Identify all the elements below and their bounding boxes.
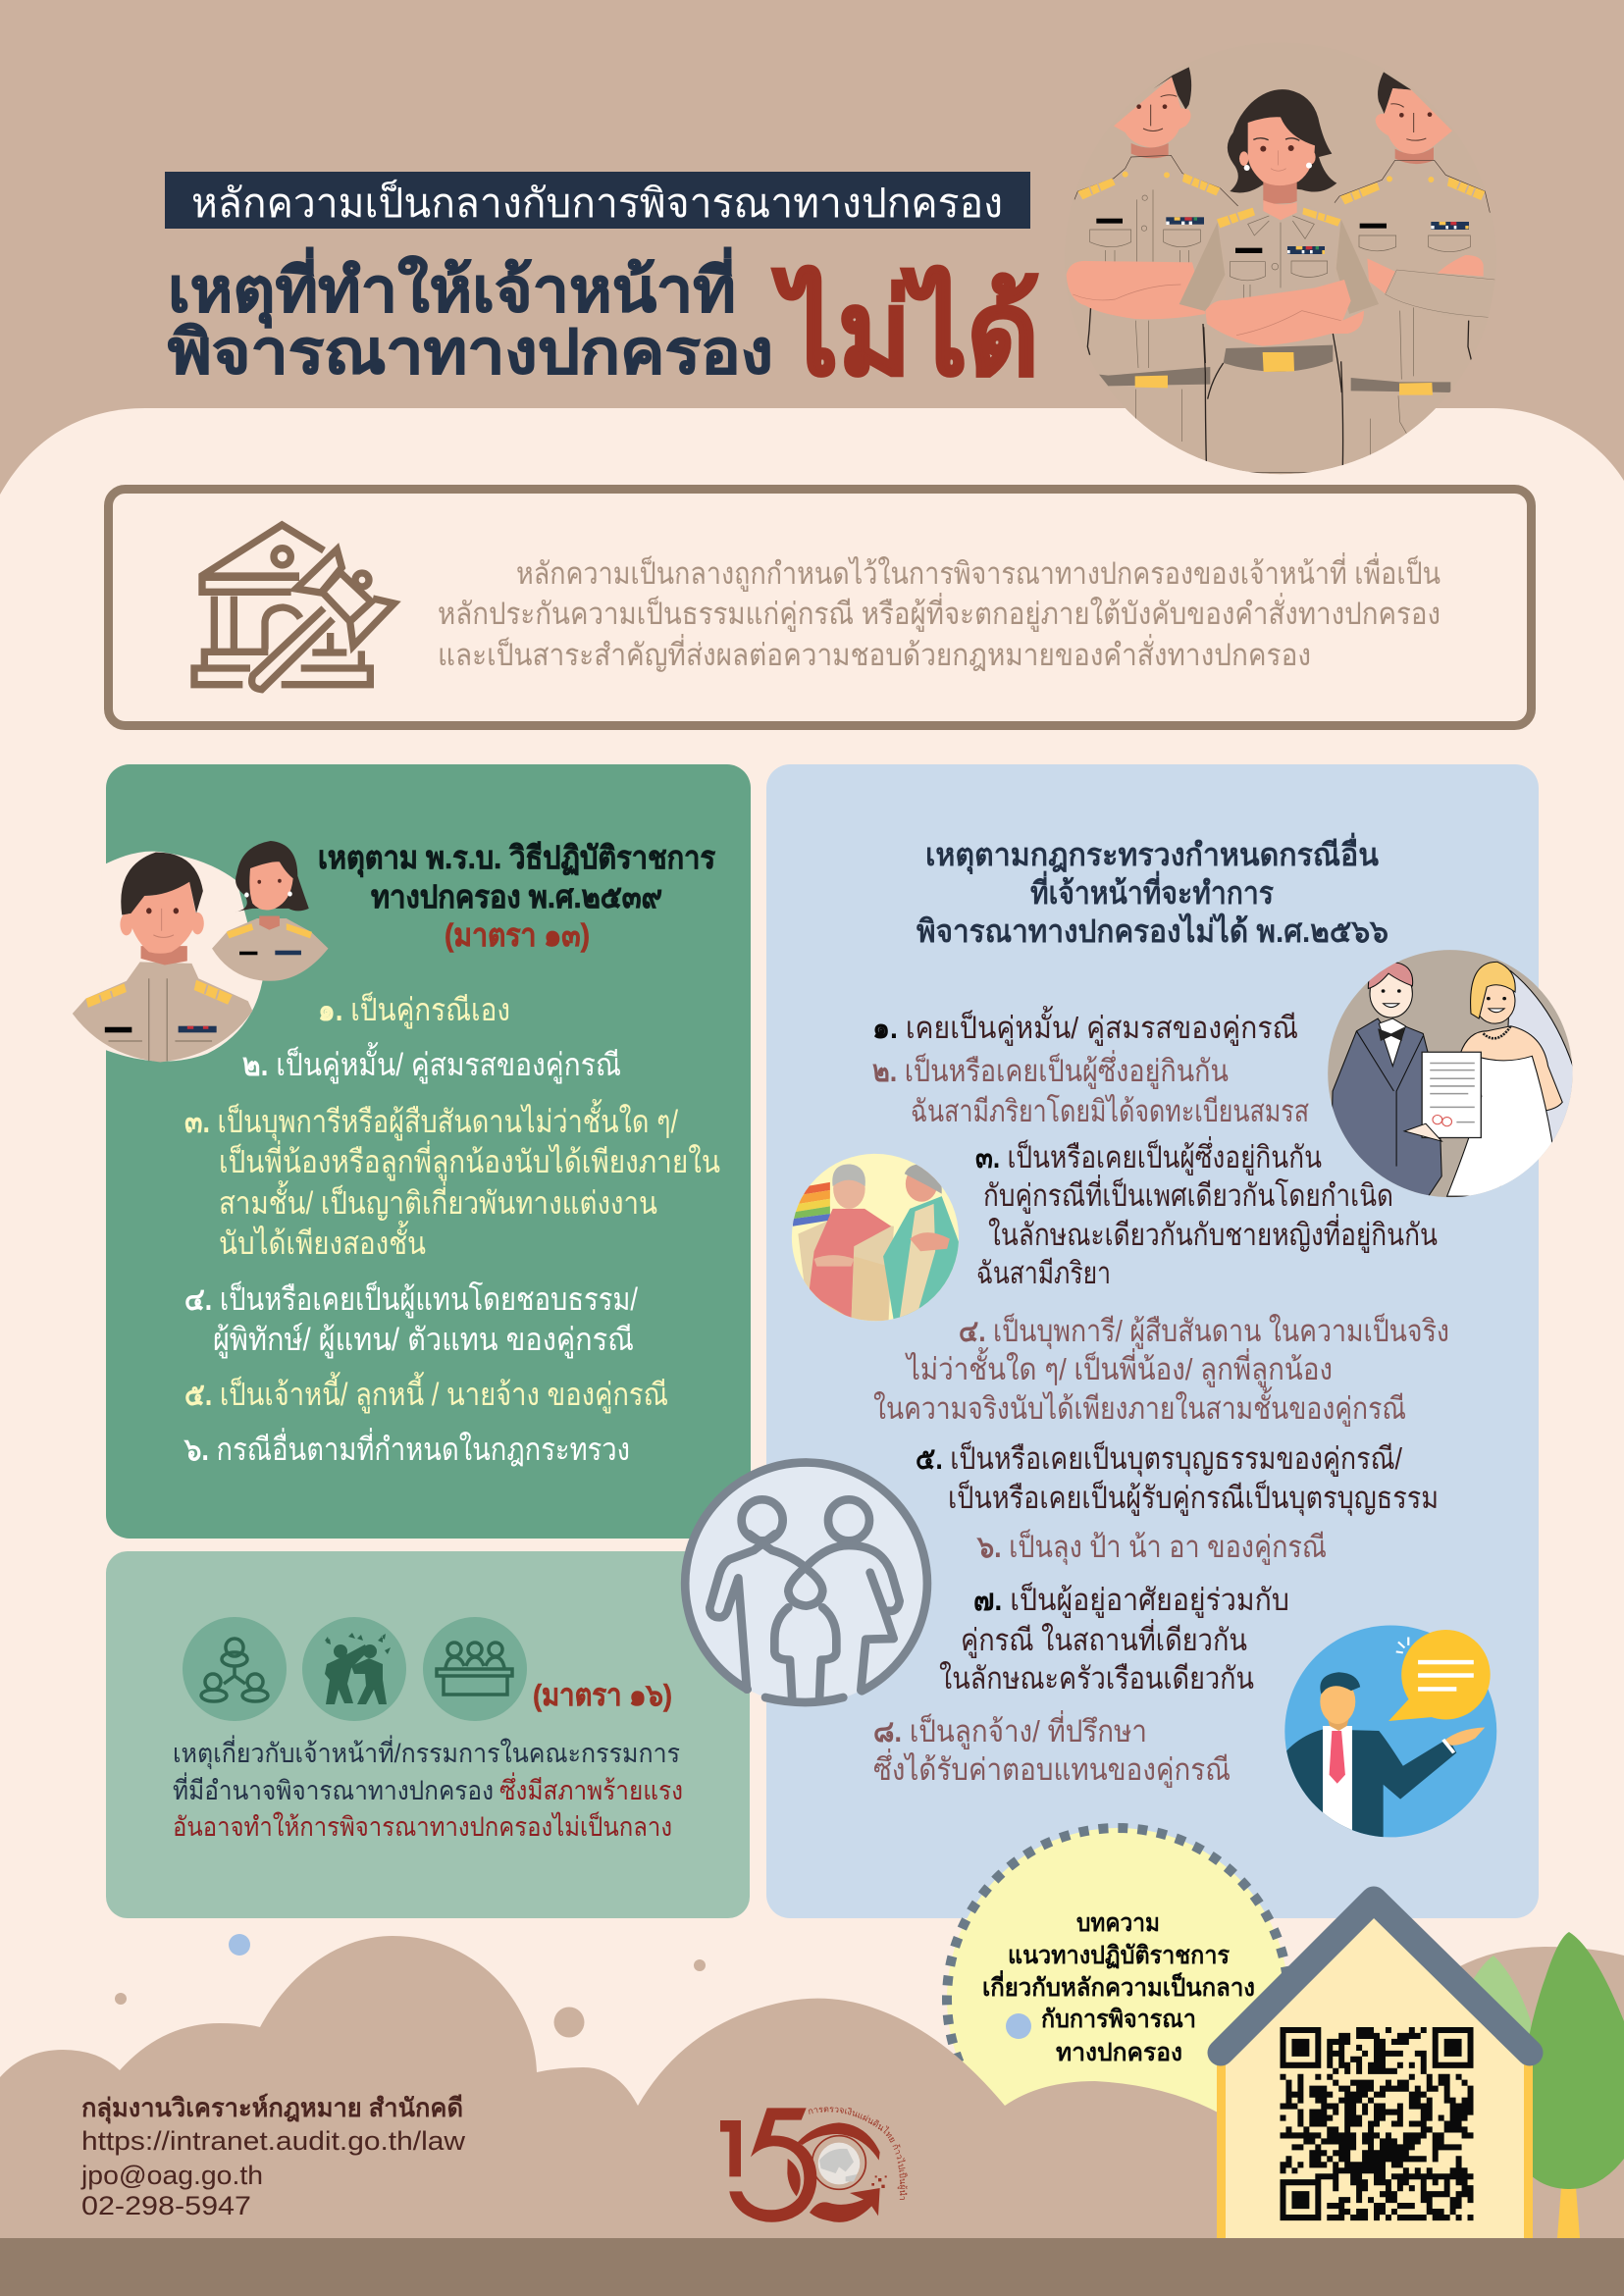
list: regulation reasons: ซึ่งได้รับค่าตอบแทนของคู่กรณี <box>873 1748 1231 1788</box>
list: section 13 reasons: ๕. เป็นเจ้าหนี้/ ลูกหนี้ / นายจ้าง ของคู่กรณี <box>184 1372 668 1414</box>
title: ไม่ได้ <box>772 266 1039 399</box>
list: regulation reasons: คู่กรณี ในสถานที่เดียวกัน <box>961 1619 1247 1658</box>
list: section 13 reasons: เป็นพี่น้องหรือลูกพี่ลูกน้องนับได้เพียงภายใน <box>219 1140 720 1181</box>
list: regulation reasons: ๒. เป็นหรือเคยเป็นผู้ซึ่งอยู่กินกัน <box>872 1050 1229 1089</box>
illustration: businessman with speech bubble <box>1283 1626 1496 1843</box>
decorative dots <box>115 1934 706 2037</box>
illustration: female officer portrait <box>212 841 328 981</box>
title <box>168 247 1039 399</box>
list: section 13 reasons: สามชั้น/ เป็นญาติเกี่ยวพันทางแต่งงาน <box>219 1180 657 1221</box>
list: regulation reasons: ๓. เป็นหรือเคยเป็นผู้ซึ่งอยู่กินกัน <box>975 1136 1322 1175</box>
list: regulation reasons: ๑. เคยเป็นคู่หมั้น/ คู่สมรสของคู่กรณี <box>872 1006 1298 1046</box>
list: section 13 reasons: ๓. เป็นบุพการีหรือผู้สืบสันดานไม่ว่าชั้นใด ๆ/ <box>184 1099 678 1141</box>
icon: house with QR code <box>1217 1900 1533 2238</box>
text: article title: ทางปกครอง <box>1056 2039 1182 2066</box>
list: regulation reasons: ในลักษณะครัวเรือนเดียวกัน <box>939 1661 1254 1696</box>
heading: regulation <box>917 832 1388 949</box>
list: regulation reasons: ฉันสามีภริยา <box>976 1256 1111 1290</box>
panel: section 16 <box>106 1551 750 1918</box>
text: section 16 description: อันอาจทำให้การพิจารณาทางปกครองไม่เป็นกลาง <box>173 1809 672 1842</box>
intro text: และเป็นสาระสำคัญที่ส่งผลต่อความชอบด้วยกฎหมายของคำสั่งทางปกครอง <box>438 634 1311 672</box>
list: regulation reasons: เป็นหรือเคยเป็นผู้รับคู่กรณีเป็นบุตรบุญธรรม <box>948 1480 1439 1517</box>
list: regulation reasons: ๘. เป็นลูกจ้าง/ ที่ปรึกษา <box>873 1710 1147 1749</box>
list: section 13 reasons: ๔. เป็นหรือเคยเป็นผู้แทนโดยชอบธรรม/ <box>184 1280 638 1319</box>
intro text: หลักความเป็นกลางถูกกำหนดไว้ในการพิจารณาทางปกครองของเจ้าหน้าที่ เพื่อเป็น <box>516 552 1441 592</box>
text: contact details: กลุ่มงานวิเคราะห์กฎหมาย สำนักคดี <box>81 2093 463 2124</box>
icon: committee table <box>423 1617 527 1721</box>
text: section 16 description: เหตุเกี่ยวกับเจ้าหน้าที่/กรรมการในคณะกรรมการ <box>173 1735 680 1770</box>
list: regulation reasons: ๗. เป็นผู้อยู่อาศัยอยู่ร่วมกับ <box>973 1582 1289 1618</box>
title: เหตุที่ทำให้เจ้าหน้าที่ <box>168 247 736 328</box>
illustration: three officers <box>1065 42 1496 474</box>
heading: regulation: เหตุตามกฎกระทรวงกำหนดกรณีอื่น <box>925 832 1379 875</box>
icon: court and gavel <box>194 525 394 690</box>
hills <box>0 1936 1624 2242</box>
icon: two people fighting <box>302 1617 406 1721</box>
QR code <box>1280 2030 1474 2218</box>
list: regulation reasons <box>872 1006 1449 1788</box>
panel: administrative procedure act <box>73 764 751 1539</box>
logo: 150 years: การตรวจเงินแผ่นดินไทย ก้าวไปเป็นผู้นำ <box>809 2107 909 2200</box>
list: regulation reasons: กับคู่กรณีที่เป็นเพศเดียวกันโดยกำเนิด <box>983 1174 1393 1214</box>
decorative dot in article circle <box>1006 2013 1031 2039</box>
text: article title: แนวทางปฏิบัติราชการ <box>1008 1942 1231 1969</box>
title: พิจารณาทางปกครอง <box>168 319 773 387</box>
illustration: male officer portrait <box>73 852 262 1062</box>
list: section 13 reasons: ๖. กรณีอื่นตามที่กำหนดในกฎกระทรวง <box>183 1428 630 1467</box>
list: regulation reasons: ในลักษณะเดียวกันกับชายหญิงที่อยู่กินกัน <box>988 1214 1438 1253</box>
text: article title: บทความ <box>1076 1909 1160 1937</box>
illustration: wedding couple <box>1328 950 1575 1197</box>
text: contact details: https://intranet.audit.go.th/law <box>81 2126 466 2156</box>
icon: trees <box>1462 1932 1624 2238</box>
text: article title: กับการพิจารณา <box>1041 2006 1196 2033</box>
list: regulation reasons: ฉันสามีภริยาโดยมิได้จดทะเบียนสมรส <box>911 1094 1309 1128</box>
list: regulation reasons: ไม่ว่าชั้นใด ๆ/ เป็นพี่น้อง/ ลูกพี่ลูกน้อง <box>904 1347 1333 1387</box>
centre officer <box>1179 89 1379 473</box>
right officer <box>1335 72 1494 454</box>
list: section 13 reasons: ผู้พิทักษ์/ ผู้แทน/ ตัวแทน ของคู่กรณี <box>213 1322 634 1359</box>
intro text <box>438 552 1441 672</box>
panel: ministerial regulation <box>766 764 1575 1918</box>
icon: family circle <box>684 1462 927 1704</box>
list: regulation reasons: ๕. เป็นหรือเคยเป็นบุตรบุญธรรมของคู่กรณี/ <box>916 1440 1402 1478</box>
heading: act: (มาตรา ๑๓) <box>445 917 590 953</box>
intro text: หลักประกันความเป็นธรรมแก่คู่กรณี หรือผู้ที่จะตกอยู่ภายใต้บังคับของคำสั่งทางปกครอง <box>438 593 1441 632</box>
list: section 13 reasons: นับได้เพียงสองชั้น <box>219 1221 426 1261</box>
heading: act <box>318 840 715 953</box>
text: article title <box>982 1909 1255 2066</box>
text: section 16 description <box>173 1735 683 1842</box>
text: contact details: 02-298-5947 <box>81 2191 251 2220</box>
ground strip <box>0 2238 1624 2296</box>
heading: act: ทางปกครอง พ.ศ.๒๕๓๙ <box>371 879 662 914</box>
heading banner: หลักความเป็นกลางกับการพิจารณาทางปกครอง <box>191 180 1003 226</box>
list: regulation reasons: ๔. เป็นบุพการี/ ผู้สืบสันดาน ในความเป็นจริง <box>959 1313 1449 1350</box>
list: regulation reasons: ๖. เป็นลุง ป้า น้า อา ของคู่กรณี <box>975 1529 1327 1566</box>
label: section 16: (มาตรา ๑๖) <box>533 1678 672 1712</box>
text: contact details: jpo@oag.go.th <box>80 2161 263 2190</box>
illustration: same-sex elderly couple <box>792 1154 961 1322</box>
text: contact details <box>80 2093 466 2220</box>
panel: intro box <box>108 489 1531 726</box>
list: section 13 reasons <box>183 991 720 1467</box>
left officer <box>1067 67 1238 442</box>
text: section 16 description: ซึ่งมีสภาพร้ายแรง <box>499 1772 683 1805</box>
icon: connected people <box>183 1617 287 1721</box>
heading: regulation: พิจารณาทางปกครองไม่ได้ พ.ศ.๒๕๖๖ <box>917 913 1388 949</box>
heading: regulation: ที่เจ้าหน้าที่จะทำการ <box>1030 870 1274 911</box>
list: section 13 reasons: ๑. เป็นคู่กรณีเอง <box>318 991 510 1029</box>
heading: act: เหตุตาม พ.ร.บ. วิธีปฏิบัติราชการ <box>318 840 715 878</box>
text: section 16 description: ที่มีอำนาจพิจารณาทางปกครอง <box>173 1772 494 1805</box>
logo: 150 years <box>720 2107 909 2222</box>
list: section 13 reasons: ๒. เป็นคู่หมั้น/ คู่สมรสของคู่กรณี <box>242 1042 621 1084</box>
text: article title: เกี่ยวกับหลักความเป็นกลาง <box>982 1970 1255 2002</box>
callout: article circle <box>947 1828 1288 2169</box>
list: regulation reasons: ในความจริงนับได้เพียงภายในสามชั้นของคู่กรณี <box>873 1386 1406 1427</box>
